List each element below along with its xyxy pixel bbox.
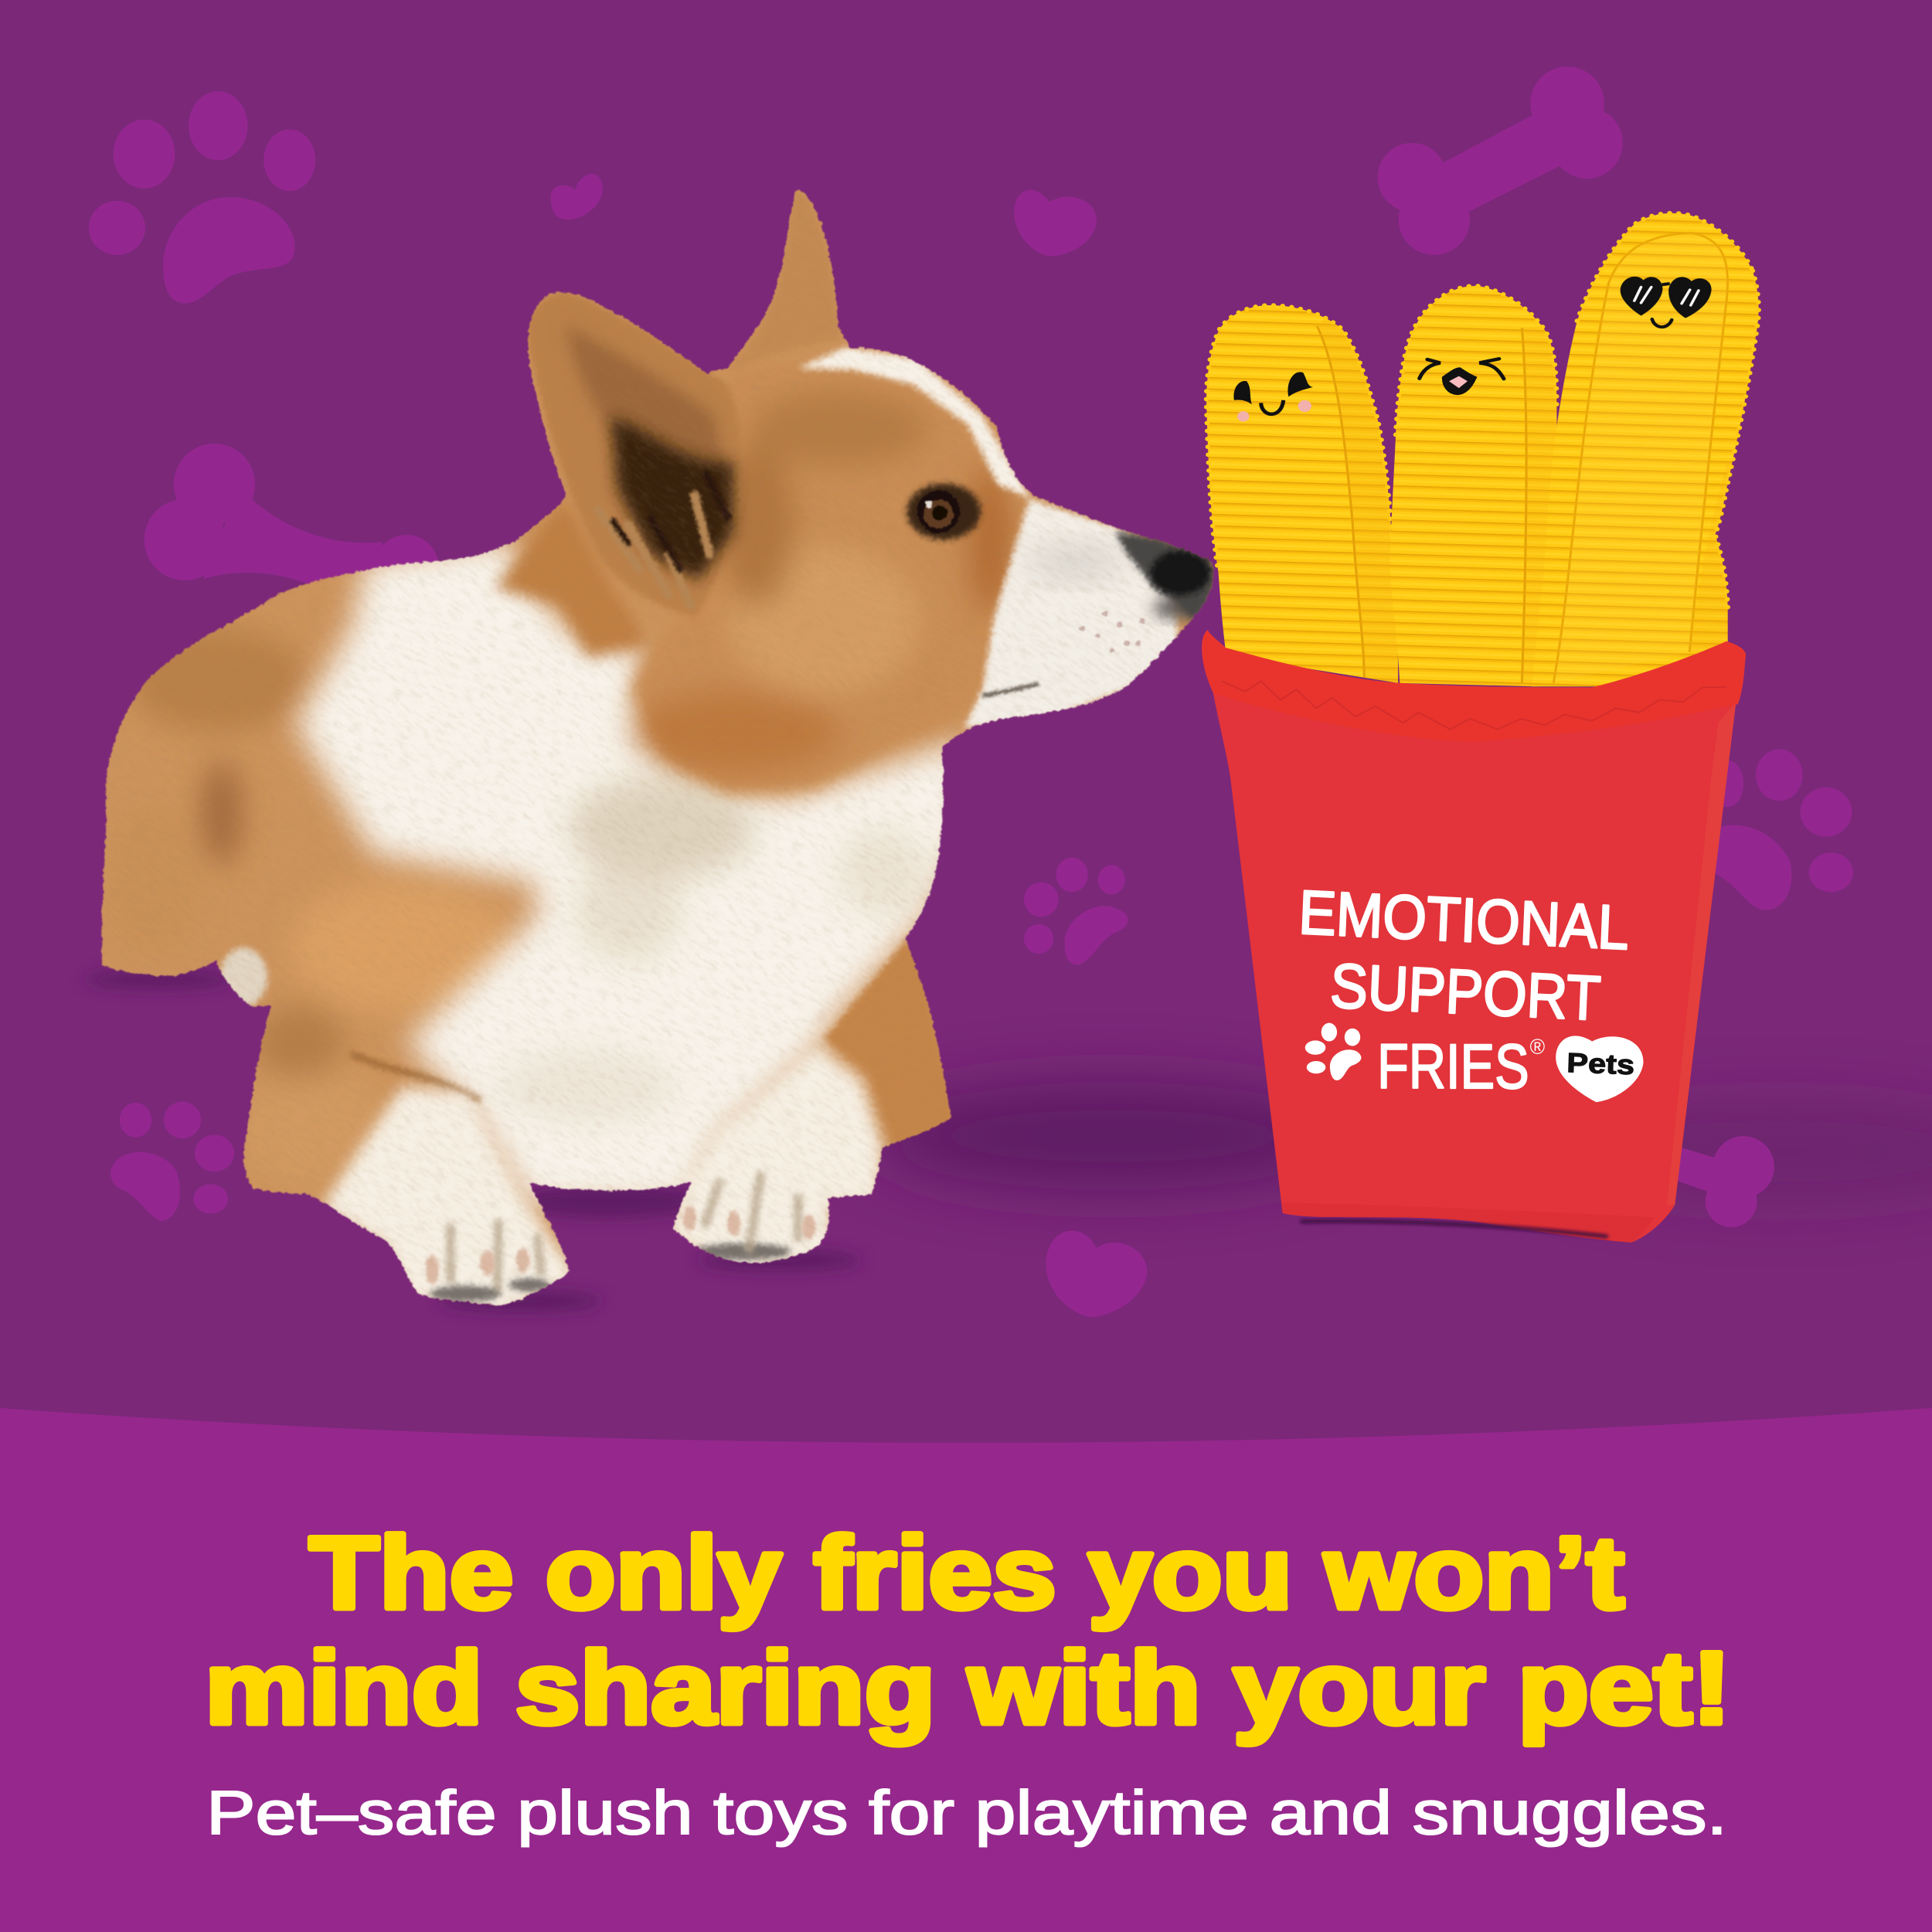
nose xyxy=(1116,532,1215,621)
dog contact shadows xyxy=(85,971,861,1311)
floor shadow band xyxy=(873,1082,1932,1202)
near ear lining xyxy=(611,417,733,580)
fry right, with sunglasses xyxy=(1514,193,1790,711)
bone: bottom right xyxy=(1675,1136,1774,1227)
heart: small top xyxy=(551,174,603,219)
muzzle grey shade xyxy=(1027,543,1124,581)
logo text: Pets: Pets xyxy=(1566,1048,1635,1081)
paw: centre xyxy=(1024,858,1128,964)
fry middle, laughing xyxy=(1384,280,1566,693)
face: heart sunglasses xyxy=(1621,277,1712,327)
bone: left behind dog xyxy=(145,444,439,604)
icon: embroidered paw xyxy=(1305,1023,1361,1080)
box rim band xyxy=(1202,630,1746,742)
flank right of foreleg xyxy=(824,931,957,1153)
face: smile with blush xyxy=(1233,372,1313,422)
box ground shadow xyxy=(1301,1221,1608,1236)
near ear inner tan xyxy=(565,325,728,473)
box embroidered label xyxy=(1298,877,1644,1102)
bone: top right xyxy=(1378,66,1623,255)
paw: right of box xyxy=(1700,749,1853,910)
box: red fries carton xyxy=(1202,630,1746,1243)
fry left, with smile xyxy=(1199,297,1403,693)
paw: lower left xyxy=(111,1101,234,1221)
neck tan xyxy=(495,499,650,658)
icon: pets heart logo xyxy=(1556,1036,1644,1102)
eye xyxy=(906,484,981,539)
heart: bottom centre xyxy=(1046,1230,1147,1317)
chest beige shading xyxy=(498,776,927,1124)
toes: left paw xyxy=(451,1219,542,1294)
label text: FRIES: FRIES xyxy=(1377,1032,1529,1102)
near ear xyxy=(527,293,743,617)
photo: corgi lying down xyxy=(88,66,1774,1315)
muzzle white xyxy=(964,499,1179,728)
background pattern: paws, bones and hearts xyxy=(89,66,1853,1317)
headline xyxy=(205,1516,1731,1746)
box side seam shading xyxy=(1667,702,1736,1205)
rear shading xyxy=(135,624,502,1079)
forehead white blaze xyxy=(798,348,1031,499)
label text: registered mark: ® xyxy=(1530,1034,1545,1059)
band: lower panel with curved top xyxy=(0,1408,1932,1932)
fries toy xyxy=(1199,193,1790,1243)
heart: top centre xyxy=(1014,190,1097,257)
paw: top left xyxy=(89,91,315,304)
hind paw xyxy=(220,947,267,1007)
box body xyxy=(1213,692,1736,1243)
headline line 1: The only fries you won’t xyxy=(309,1516,1624,1631)
chest white fur xyxy=(295,539,964,1205)
nails xyxy=(426,1206,816,1284)
rim stitching xyxy=(1222,681,1726,730)
subheading: Pet–safe plush toys for playtime and snuggles. xyxy=(206,1778,1727,1847)
head shading xyxy=(631,392,1011,773)
mouth line xyxy=(983,684,1039,696)
whisker spots xyxy=(1080,611,1145,654)
label text: SUPPORT: SUPPORT xyxy=(1329,951,1602,1033)
crease above foreleg xyxy=(351,1053,480,1101)
headline line 2: mind sharing with your pet! xyxy=(205,1631,1731,1746)
toes: right paw xyxy=(704,1172,798,1253)
label text: EMOTIONAL: EMOTIONAL xyxy=(1298,877,1631,963)
head tan xyxy=(631,364,1029,794)
face: laughing xyxy=(1420,359,1504,393)
ear tufts xyxy=(598,473,728,606)
far ear xyxy=(728,191,840,371)
left foreleg xyxy=(321,1087,580,1316)
right foreleg xyxy=(665,1046,883,1275)
dog base coat xyxy=(100,189,1215,1306)
